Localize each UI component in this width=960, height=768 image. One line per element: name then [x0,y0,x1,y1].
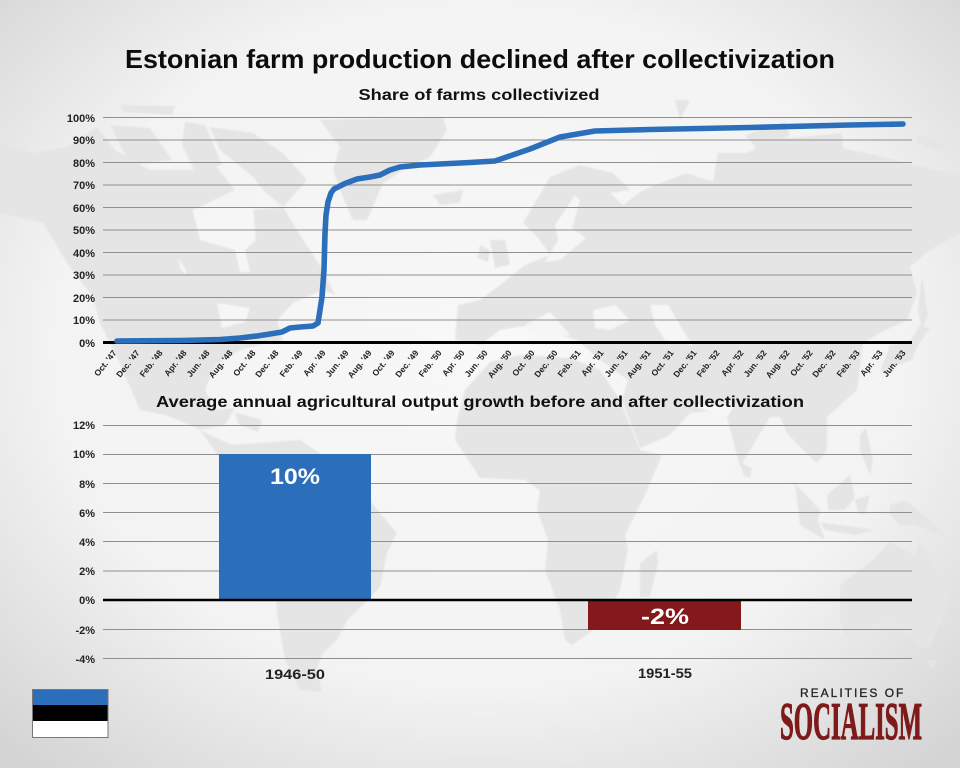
bar chart: output growth: -2% [75,625,95,637]
x axis labels: Apr. '52 [719,348,746,378]
bar chart: output growth: 8% [79,479,95,491]
x axis labels: Oct. '51 [649,348,676,378]
x axis labels: Jun. '52 [741,348,769,379]
x axis labels: Feb. '49 [277,348,305,379]
x axis labels: Dec. '47 [114,348,142,379]
category labels [265,665,692,682]
line chart: share of farms collectivized: 10% [73,315,95,327]
x axis labels: Aug. '50 [486,348,514,380]
x axis labels: Dec. '52 [810,348,838,379]
x axis labels: Feb. '53 [834,348,862,379]
x axis labels: Jun. '51 [602,348,630,379]
line chart heading: Share of farms collectivized [358,87,600,104]
bar chart heading: Average annual agricultural output growth before and after collectivization [156,394,804,411]
line chart: share of farms collectivized: 30% [73,270,95,282]
bar chart: output growth: 12% [73,420,95,432]
bar chart: output growth [73,420,912,682]
line chart: share of farms collectivized: 40% [73,248,95,260]
x axis labels: Aug. '52 [764,348,792,380]
line chart: share of farms collectivized: 0% [79,338,95,350]
x axis labels: Feb. '52 [694,348,722,379]
x axis labels: Jun. '48 [184,348,212,379]
x axis labels: Apr. '51 [579,348,606,378]
line chart: share of farms collectivized [67,113,912,380]
bar chart: output growth: 4% [79,537,95,549]
x axis labels: Aug. '49 [346,348,374,380]
x axis labels: Dec. '49 [393,348,421,379]
x axis labels: Jun. '53 [880,348,908,379]
category labels: 1946-50 [265,666,325,682]
x axis labels: Apr. '48 [162,348,189,378]
x axis labels: Apr. '53 [858,348,885,378]
line chart: share of farms collectivized: 50% [73,225,95,237]
bar: 1951-55: -2% [641,604,689,629]
x axis labels: Oct. '50 [510,348,537,378]
x axis labels: Aug. '51 [625,348,653,380]
x axis labels: Dec. '48 [253,348,281,379]
bar chart: output growth: 2% [79,566,95,578]
x axis labels: Dec. '51 [671,348,699,379]
category labels: 1951-55 [638,665,692,681]
icon: Estonian flag [32,689,108,738]
x axis labels: Apr. '50 [440,348,467,378]
bar: 1946-50 [219,454,371,600]
x axis labels: Oct. '49 [370,348,397,378]
bar chart: output growth: 0% [79,595,95,607]
data line [117,124,903,341]
x axis labels: Dec. '50 [532,348,560,379]
line chart: share of farms collectivized: 60% [73,203,95,215]
x axis labels: Aug. '48 [207,348,235,380]
x axis labels: Oct. '48 [231,348,258,378]
x axis labels: Jun. '50 [462,348,490,379]
bar: 1951-55 [588,600,741,630]
x axis labels: Jun. '49 [323,348,351,379]
line chart: share of farms collectivized: 100% [67,113,95,125]
bar: 1946-50: 10% [270,464,320,489]
line chart: share of farms collectivized: 70% [73,180,95,192]
x axis labels: Oct. '52 [788,348,815,378]
x axis labels: Feb. '48 [137,348,165,379]
x axis labels: Feb. '50 [416,348,444,379]
bar chart: output growth: -4% [75,654,95,666]
x axis labels: Feb. '51 [555,348,583,379]
x axis labels [92,348,908,380]
line chart: share of farms collectivized: 20% [73,293,95,305]
line chart: share of farms collectivized: 80% [73,158,95,170]
logo: Realities of Socialism: REALITIES OF [800,686,905,700]
x axis labels: Apr. '49 [301,348,328,378]
bar chart: output growth: 10% [73,449,95,461]
bar chart: output growth: 6% [79,508,95,520]
line chart: share of farms collectivized: 90% [73,135,95,147]
x axis labels: Oct. '47 [92,348,119,378]
title: Estonian farm production declined after collectivization [125,44,835,74]
